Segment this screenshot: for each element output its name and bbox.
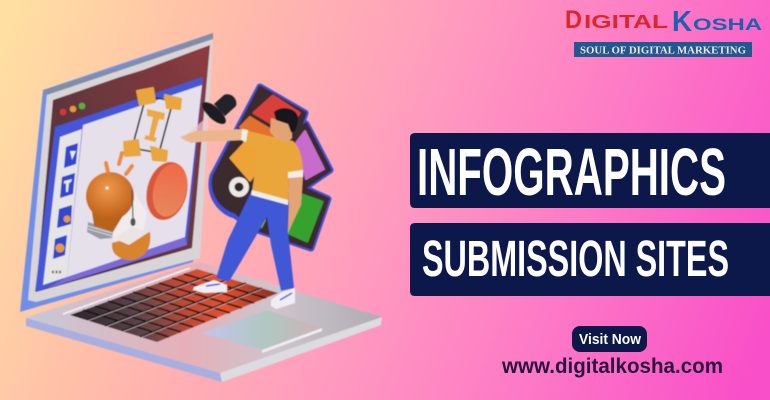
red circle button (140, 158, 194, 224)
window dots (60, 103, 85, 115)
trousers (216, 190, 294, 291)
logo wordmark: IGITAL (584, 12, 668, 32)
trackpad (202, 310, 322, 353)
illustration: laptop with designer (20, 33, 382, 382)
orange cup (112, 227, 150, 260)
toolbar buttons (52, 143, 78, 272)
shirt trim (241, 129, 303, 205)
logo wordmark (565, 6, 762, 38)
hair (274, 108, 298, 132)
left arm (180, 129, 246, 143)
dropper tool (181, 94, 236, 142)
left shoe (193, 280, 227, 293)
light bulb icon (86, 153, 136, 239)
spoon (132, 190, 133, 218)
logo tagline (574, 42, 752, 57)
head (270, 118, 292, 142)
right shoe (271, 288, 295, 309)
logo wordmark: K (672, 6, 692, 38)
visit now button: Visit Now (579, 331, 641, 348)
laptop screen (20, 33, 213, 312)
visit now button (572, 326, 647, 352)
app page (67, 85, 202, 277)
logo wordmark: D (565, 6, 582, 34)
laptop base (26, 262, 382, 382)
shirt (243, 130, 303, 203)
logo tagline: SOUL OF DIGITAL MARKETING (580, 46, 746, 56)
logo (565, 6, 762, 57)
text frame icon (124, 88, 181, 161)
person pointing at screen (180, 108, 303, 309)
logo wordmark: OSHA (693, 15, 762, 34)
right arm (274, 175, 303, 241)
page fold behind bulb (113, 185, 147, 241)
keyboard (70, 269, 278, 342)
colour palette (212, 87, 330, 248)
website url: www.digitalkosha.com (501, 355, 723, 378)
